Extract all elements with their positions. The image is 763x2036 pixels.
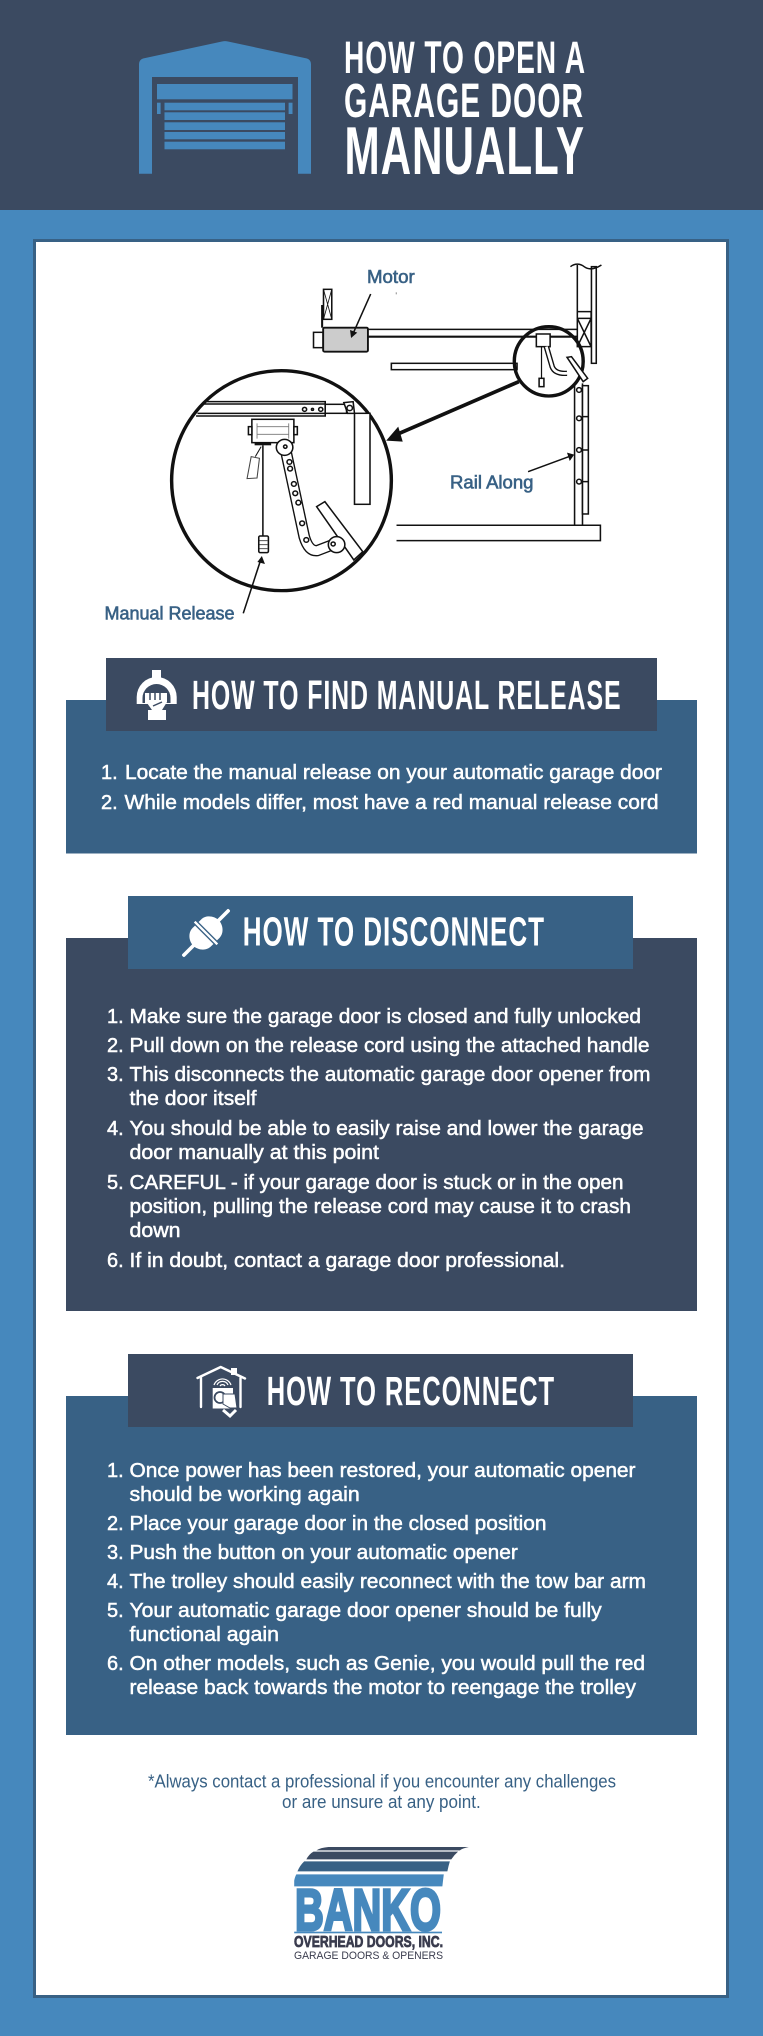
icon: plug: [171, 898, 241, 968]
panel: reconnect: [66, 1354, 697, 1735]
list: Place your garage door in the closed position: [130, 1513, 546, 1535]
logo: Banko Overhead Doors: GARAGE DOORS & OPENERS: [294, 1950, 443, 1962]
list: Locate the manual release on your automatic garage door: [125, 762, 662, 784]
arrow: manual release: [243, 556, 265, 613]
logo: Banko Overhead Doors: [294, 1847, 469, 1962]
logo: Banko Overhead Doors: BANKO: [295, 1878, 441, 1943]
list: the door itself: [130, 1088, 257, 1110]
list: 5.: [107, 1600, 124, 1622]
list: [107, 1006, 650, 1272]
list: 1.: [107, 1460, 124, 1482]
list: The trolley should easily reconnect with the tow bar arm: [130, 1571, 646, 1593]
icon: hand pulling release: [137, 670, 177, 720]
header band: [0, 0, 763, 210]
title: [344, 32, 586, 189]
list: door manually at this point: [130, 1142, 379, 1164]
white content card: [34, 240, 728, 1996]
list: 3.: [107, 1542, 124, 1564]
list: [107, 1460, 646, 1699]
label: rail along: Rail Along: [450, 473, 534, 493]
list: 1.: [101, 762, 118, 784]
list: If in doubt, contact a garage door professional.: [130, 1250, 565, 1272]
list: You should be able to easily raise and lower the garage: [130, 1118, 644, 1140]
list: On other models, such as Genie, you would pull the red: [130, 1653, 645, 1675]
logo: Banko Overhead Doors: OVERHEAD DOORS, INC.: [294, 1934, 443, 1951]
motor unit: [314, 289, 368, 352]
list: CAREFUL - if your garage door is stuck or in the open: [130, 1172, 624, 1194]
title: GARAGE DOOR: [344, 75, 584, 128]
list: 6.: [107, 1250, 124, 1272]
title: HOW TO OPEN A: [344, 32, 586, 83]
list: 5.: [107, 1172, 124, 1194]
list: 6.: [107, 1653, 124, 1675]
list: functional again: [130, 1624, 279, 1646]
list: 2.: [107, 1035, 124, 1057]
panel: find manual release: [66, 658, 697, 854]
title: MANUALLY: [344, 113, 585, 189]
arrow: motor: [350, 294, 371, 338]
list: This disconnects the automatic garage door opener from: [130, 1064, 650, 1086]
list: 4.: [107, 1571, 124, 1593]
label: manual release: Manual Release: [104, 603, 234, 623]
panel: disconnect: [66, 896, 697, 1311]
footnote: [148, 1772, 616, 1812]
footnote: *Always contact a professional if you encounter any challenges: [148, 1772, 616, 1792]
diagram: garage door opener: [104, 264, 601, 623]
list: should be working again: [130, 1484, 360, 1506]
list: 2.: [101, 792, 118, 814]
list: Push the button on your automatic opener: [130, 1542, 518, 1564]
icon: garage: [139, 41, 311, 174]
list: [101, 762, 662, 814]
label: motor: Motor: [367, 267, 415, 287]
list: down: [130, 1220, 180, 1242]
arrow: rail along: [528, 453, 574, 472]
list: Once power has been restored, your automatic opener: [130, 1460, 636, 1482]
list: While models differ, most have a red manual release cord: [124, 792, 658, 814]
icon: house with opener button: [198, 1367, 245, 1416]
list: Pull down on the release cord using the attached handle: [130, 1035, 650, 1057]
list: position, pulling the release cord may cause it to crash: [130, 1196, 631, 1218]
arrow: zoom: [386, 382, 519, 442]
list: 4.: [107, 1118, 124, 1140]
list: release back towards the motor to reengage the trolley: [130, 1677, 636, 1699]
list: Your automatic garage door opener should be fully: [130, 1600, 602, 1622]
list: Make sure the garage door is closed and fully unlocked: [130, 1006, 641, 1028]
footnote: or are unsure at any point.: [282, 1792, 481, 1812]
heading: HOW TO RECONNECT: [267, 1368, 555, 1414]
list: 3.: [107, 1064, 124, 1086]
heading: HOW TO DISCONNECT: [243, 908, 545, 954]
list: 2.: [107, 1513, 124, 1535]
list: 1.: [107, 1006, 124, 1028]
large zoom circle: [172, 371, 391, 591]
small zoom circle: [514, 327, 588, 396]
